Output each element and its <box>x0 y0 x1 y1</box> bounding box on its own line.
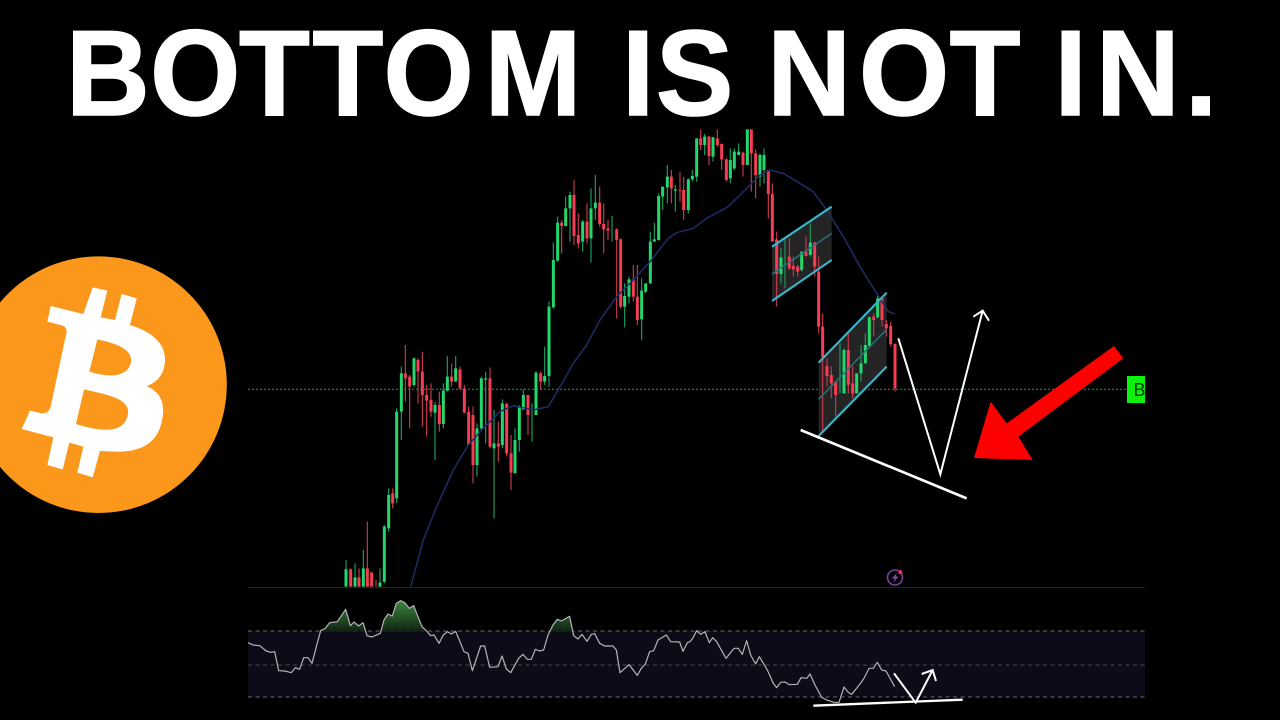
channel 1 fill <box>772 207 832 301</box>
green bodies <box>781 243 878 393</box>
moving average line <box>411 170 895 587</box>
candlesticks left and middle <box>346 129 777 587</box>
RSI line <box>248 601 895 702</box>
green price tag <box>1127 376 1146 403</box>
price level dotted line <box>248 388 1127 390</box>
RSI panel <box>248 601 1145 706</box>
green wicks <box>346 129 764 587</box>
icon: bitcoin logo <box>0 256 227 513</box>
red wicks <box>351 129 777 587</box>
RSI support line and arrow <box>813 670 963 706</box>
projected path arrow <box>898 311 989 474</box>
green wicks <box>781 223 878 393</box>
title: BOTTOM IS NOT IN. <box>66 5 1217 142</box>
channel 2 fill <box>819 293 887 436</box>
green price tag: B <box>1134 380 1146 400</box>
support trend line <box>801 430 967 498</box>
channel 2 lines <box>819 293 887 436</box>
candlesticks right side <box>781 223 895 432</box>
RSI background band <box>248 631 1145 697</box>
RSI guide lines <box>248 631 1145 697</box>
channel 1 lines <box>772 207 832 301</box>
RSI overbought fills <box>321 601 572 631</box>
red wicks <box>789 237 895 432</box>
red bodies <box>789 243 895 395</box>
green bodies <box>346 129 764 587</box>
icon: lightning alert <box>888 570 902 585</box>
pane separator <box>248 586 1145 588</box>
red bodies <box>351 129 777 587</box>
red arrow <box>974 346 1123 460</box>
channel lines and drawn projection <box>772 207 1123 498</box>
parallel channels <box>772 207 887 436</box>
